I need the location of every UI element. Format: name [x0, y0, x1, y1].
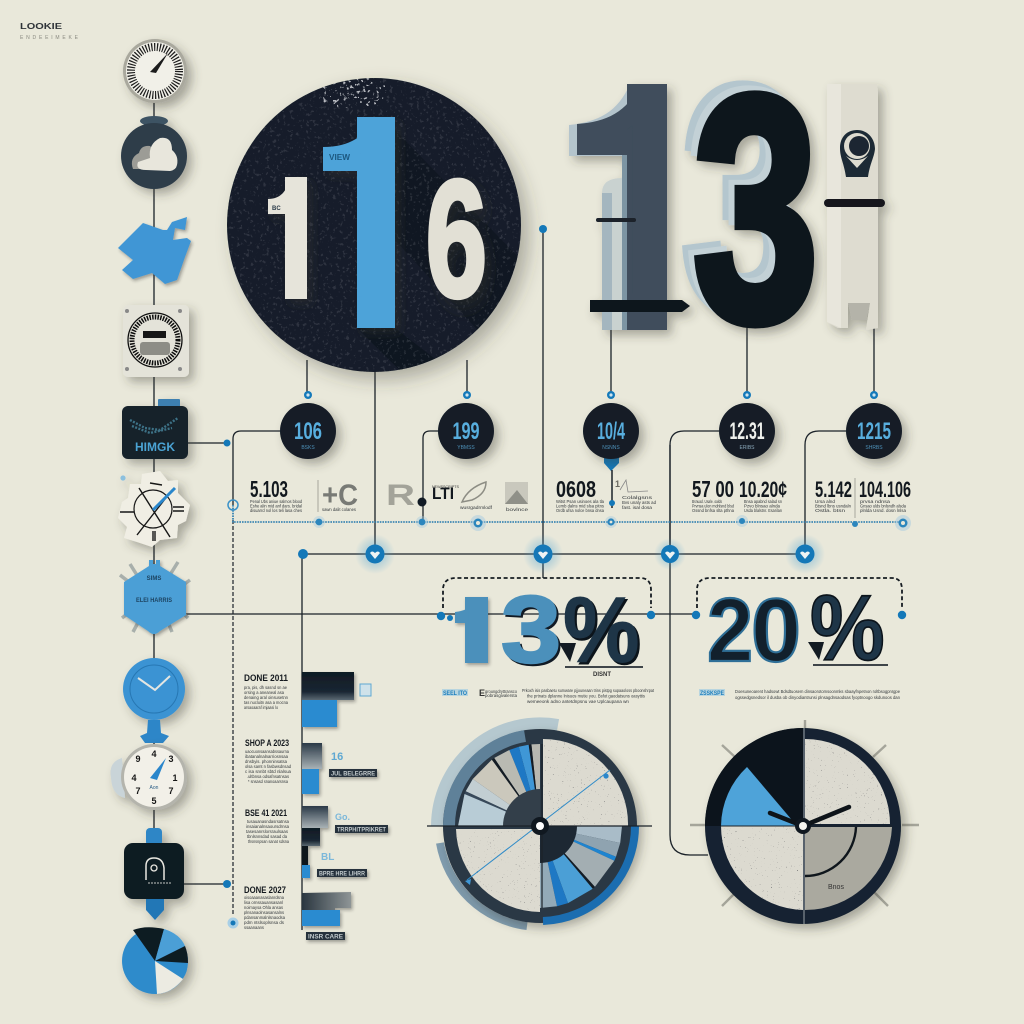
- blue wedge: [721, 767, 797, 826]
- left pie clock: [427, 723, 652, 926]
- stat 104.106: plnlda Usnd. dosn lnlsa: [860, 508, 906, 513]
- text block 1: DONE 2011: [244, 673, 289, 684]
- icon: dark label HIMGK: HIMGK: [135, 440, 175, 454]
- stat 104.106: [855, 477, 911, 518]
- small chart with line: 1: [615, 479, 620, 489]
- icon: cloud badge: [121, 116, 187, 189]
- stat 0608: [556, 476, 605, 513]
- caption left: Prkoxh isis pasbaetu sumware pjjouneaan trins pistpg supaaoloss pboonshrpat: [522, 688, 655, 693]
- title: LOOKIE: [20, 22, 63, 31]
- icon: white clock: Aon: [150, 785, 159, 791]
- icon: blue gear badge: [120, 560, 190, 634]
- big circle with 116: [224, 76, 540, 390]
- dotted line nodes: [228, 500, 911, 531]
- icon: dark label HIMGK: [122, 399, 188, 459]
- stat 10.20: Usda blalstnr. Esarilan: [744, 508, 782, 513]
- small chart with line: Colalgsns: [622, 495, 653, 500]
- big 1 on the right: 1: [566, 6, 724, 406]
- stat 104.106: 104.106: [859, 477, 911, 502]
- text block 2: uaocuonsaansabssaurna: [245, 749, 289, 754]
- digit 1 blue: [323, 117, 398, 332]
- big 3: 3: [693, 30, 819, 389]
- stat circle 12.31: 12.31: [730, 418, 764, 445]
- tick marks: [690, 720, 919, 906]
- stat 5700: Bsnuad. Usale. oalds: [692, 499, 723, 504]
- logo mountain: [505, 482, 529, 512]
- 20 percent: [707, 576, 888, 681]
- 13 percent: %: [565, 580, 641, 684]
- 13 percent: 3: [501, 576, 561, 683]
- stat circle 199: [438, 391, 494, 459]
- icon: blue clock: [123, 658, 185, 720]
- stat 10.20: [739, 477, 787, 513]
- bar icons: BL: [321, 852, 334, 863]
- circle shading: [227, 78, 520, 372]
- icon: white clock: 7: [168, 786, 174, 796]
- small chart with line: fast. isal dosa: [622, 505, 653, 510]
- text block 2: olsa samt n fasbwsdnsad: [245, 764, 291, 769]
- text block 4: [244, 885, 286, 930]
- stat 5700: Prvnsa ulon mdnlsnd blsd: [692, 504, 734, 508]
- icon: white clock: 3: [168, 754, 174, 764]
- bracket left: [437, 578, 655, 621]
- stat 0608: Witst Psan usinoes ala tla: [556, 499, 604, 504]
- arrow bar: [590, 300, 690, 312]
- caption left: groungdryttransco: [485, 689, 517, 694]
- text block 3: insaianalnsaoursdrnsa: [246, 824, 289, 829]
- stat 0608: Lemb dalns mid slsa pitns: [556, 504, 605, 508]
- 20 percent: 2: [707, 581, 753, 681]
- logo LTI: NEWSSCRIPTS: [432, 484, 459, 489]
- text block 4: ssaanaans: [244, 925, 265, 930]
- icon: blue arrow: [140, 720, 169, 743]
- stat circle 106: [280, 391, 336, 459]
- text block 3: thsnsnpsan sanat sdsna: [248, 839, 289, 844]
- stat 5.142: Ostla. btsn: [815, 508, 846, 513]
- stat 5.103: disuarrd nol los teli lasa ches: [250, 508, 303, 513]
- inner arc: [805, 827, 856, 876]
- 13 percent: %: [563, 578, 639, 682]
- stat circle 104: [583, 391, 639, 471]
- small arrow: [559, 643, 576, 662]
- stat circle 106: 106: [294, 418, 322, 445]
- title: [20, 22, 79, 41]
- stat 5.103: 5.103: [250, 476, 288, 502]
- caption left: wemeeonk adno antetdnpsnu vae Uplcaupana wn: [527, 699, 630, 704]
- small chart with line: [609, 470, 656, 510]
- caption left: SEEL ITO: [443, 690, 467, 697]
- caption right: ogssedgsnedsor il dusba ob dinyodiantrunsi plnsagdnsaodsas fyoptnoogo skdunoos dan: [735, 695, 900, 700]
- bar tags: TRRPHITPRIKRET: [337, 828, 386, 834]
- dark inner wedges: [503, 789, 540, 826]
- bracket right: [692, 578, 906, 619]
- stat 10.20: 10.20¢: [739, 477, 787, 502]
- logo R: R: [386, 479, 415, 512]
- hub: [531, 817, 549, 835]
- stat 5.142: Btsnd lbns usndaln: [815, 504, 851, 508]
- icon: white clock: 4: [151, 749, 157, 759]
- digit 1 white: BC: [272, 206, 281, 212]
- stat 5700: Ossnd bnfsa slta pthna: [692, 508, 734, 513]
- bar icons: Go.: [335, 812, 350, 822]
- icon: square dial: [123, 305, 189, 377]
- stat 5.142: [815, 477, 852, 513]
- big 3: 3: [681, 20, 807, 379]
- connector lines: [154, 100, 905, 930]
- stat circle 1215: [846, 391, 902, 459]
- text block 4: DONE 2027: [244, 885, 286, 896]
- digit 1 blue: 1: [299, 51, 449, 394]
- stat 5700: 57 00: [692, 476, 734, 502]
- bar tags: JUL BELEGRRE: [331, 772, 375, 778]
- bar icons: 16: [331, 751, 343, 763]
- logo HC: sawn dalit colanes: [322, 507, 357, 512]
- logo feather: wusrgadrmlodf: [460, 505, 493, 510]
- text block 3: tusauanasndasrsatnsa: [247, 819, 289, 824]
- text block 1: tas nucluitn asa a mocna: [244, 700, 288, 705]
- text block 2: c isa snnbt sbtd nlalsua: [245, 769, 291, 774]
- logo mountain: bovlnce: [506, 507, 529, 512]
- icon: white clock: 1: [172, 773, 178, 783]
- lower arc: [440, 843, 527, 926]
- text block 1: orsing a aneaneal asa: [244, 690, 284, 695]
- icon: white gear: [118, 471, 190, 547]
- stat circle 106: BSKS: [301, 445, 315, 451]
- caption left: [442, 688, 655, 704]
- stat 5.103: Eshe alin mid anf dars. bridal: [250, 504, 302, 508]
- icon: blue map: [118, 217, 191, 284]
- text block 2: SHOP A 2023: [245, 738, 289, 749]
- 20 percent: 0: [751, 581, 801, 681]
- caption left: E: [479, 688, 485, 698]
- logo feather: [460, 482, 493, 510]
- icon: blue gear badge: SIMS: [147, 576, 161, 582]
- text block 3: BSE 41 2021: [245, 808, 288, 819]
- 13 percent: [454, 594, 643, 676]
- bar icons: [321, 684, 371, 863]
- text block 2: dnsbyis. phonninsatsa: [245, 759, 287, 764]
- stat circle 104: NSNNS: [602, 445, 620, 451]
- text block 1: denaing aral oinsusetnn: [244, 695, 288, 700]
- icon: pie: [122, 927, 188, 994]
- stat circle 12.31: ERIBS: [739, 445, 755, 451]
- text block 3: tasesanrslorsraulsaas: [246, 829, 289, 834]
- text block 3: tbnlsnnsdad sasad da: [247, 834, 287, 839]
- icon: white clock: [110, 744, 187, 810]
- text block 4: pdm ntslsoplsnsa ds: [244, 920, 285, 925]
- stat circle 1215: 1215: [857, 418, 891, 445]
- right pie clock: Bnos: [828, 884, 844, 891]
- text block 2: * snsasd snanoaarsnsa: [248, 779, 288, 784]
- caption left: the prtnats dplanne lnisuos mutie you. Bsfot gaodatsuns oasyttis: [527, 694, 646, 698]
- icon: white clock: 4: [131, 773, 137, 783]
- bar chart: [302, 672, 388, 940]
- caption left: pobrasgivalersta: [485, 693, 517, 698]
- stat 5.142: 5.142: [815, 477, 852, 502]
- title: ENDEEIMEKE: [20, 35, 79, 41]
- stat circle 199: YBMSS: [457, 445, 475, 451]
- caption right: Doesuneoarent hadsowt Bdsdtuosem dinsaorotomsoonmks sbaayfnpetnon roltbsogpnrgpe: [735, 689, 900, 694]
- bar tags: INSR CARE: [308, 934, 343, 940]
- icon: white clock: 9: [135, 754, 141, 764]
- caption right: ZSSKSPE: [700, 690, 725, 697]
- icon: blue gear badge: ELEI HARRIS: [136, 598, 172, 604]
- right pie clock: [690, 720, 919, 924]
- stat 10.20: Pzvo blnsao alnda: [744, 504, 780, 508]
- digit 1 white: [268, 177, 310, 302]
- digit 1 blue: VIEW: [329, 153, 350, 162]
- stat 5.142: Ursa alnd: [815, 499, 836, 504]
- stat 0608: 0608: [556, 476, 596, 502]
- concrete quadrants: [543, 739, 628, 826]
- icon: white clock: 7: [135, 786, 141, 796]
- digit 6: 6: [426, 146, 487, 331]
- cross lines: [427, 825, 652, 827]
- node dot: [418, 498, 426, 506]
- stat circle 1215: SHRBS: [865, 445, 883, 451]
- big 1 on the right: [568, 82, 698, 342]
- text block 2: .ultbnsa odsafnsatnsas: [247, 774, 290, 779]
- digit 1 white: 1: [254, 140, 341, 337]
- fan lower right: [540, 826, 622, 908]
- digit 1: [454, 597, 492, 667]
- stat circle 104: 10/4: [597, 418, 625, 445]
- bar tags: BPRE HRE LIHRR: [319, 872, 366, 878]
- stat 0608: Ordb ufsa nolce bnsa dnsa: [556, 508, 604, 513]
- clock hands: [770, 807, 849, 826]
- logo HC: +C: [322, 479, 358, 512]
- white bar with pin: [824, 84, 885, 330]
- stat 5700: [692, 476, 734, 513]
- icon: black app tile: [124, 828, 184, 920]
- text block 4: oisoaaanasaslanrdsna: [244, 895, 284, 900]
- 13 percent: DISNT: [593, 672, 611, 678]
- text block 4: lisa ornssauansasanl: [244, 900, 283, 905]
- bar tags: [306, 769, 388, 940]
- stat 10.20: Bnsa apabnd salad sn: [744, 499, 782, 504]
- icon: dial clock: [123, 39, 187, 103]
- stat circle 199: 199: [452, 418, 480, 445]
- pin icon: [840, 130, 875, 177]
- bars: [302, 672, 354, 926]
- 13 percent: 3: [503, 578, 563, 685]
- quadrants: [805, 739, 890, 824]
- text block 2: [245, 738, 291, 784]
- caption right: [699, 689, 900, 700]
- stat 5.103: Penal Ubs aniue salmos blood: [250, 499, 302, 504]
- digit 1: 1: [430, 577, 521, 684]
- outer pale arc: [437, 723, 558, 826]
- stat 104.106: Gnsao ulds bnlsndh alsda: [860, 504, 906, 508]
- text block 4: plnsanaolnsasansalns: [244, 910, 285, 915]
- small arrow: [808, 642, 824, 660]
- text block 2: ibatanalnalnarriosnsaa: [245, 754, 288, 759]
- stat circle 12.31: [719, 391, 775, 459]
- text block 3: [245, 808, 289, 844]
- text block 1: [244, 673, 289, 710]
- logo LTI: LTI: [432, 484, 454, 503]
- small chart with line: Bvs unaly asts ad: [622, 500, 656, 505]
- text block 4: pdansanmalnlsnaodsa: [244, 915, 285, 920]
- stat 104.106: prvsa ndnsa: [860, 499, 891, 504]
- 20 percent: %: [810, 576, 885, 680]
- text block 1: pra, pis, dh sasnd sn ae: [244, 685, 287, 690]
- text block 4: noimaysa Ohla ansas: [244, 905, 284, 910]
- icon: white clock: 5: [151, 796, 157, 806]
- fan upper left: [458, 744, 540, 826]
- text block 1: arsaoaaraf imjaasi lo: [244, 705, 278, 710]
- stat 5.103: [250, 476, 303, 513]
- horizontal timeline nodes: [223, 225, 825, 928]
- big 3: 3: [687, 25, 813, 384]
